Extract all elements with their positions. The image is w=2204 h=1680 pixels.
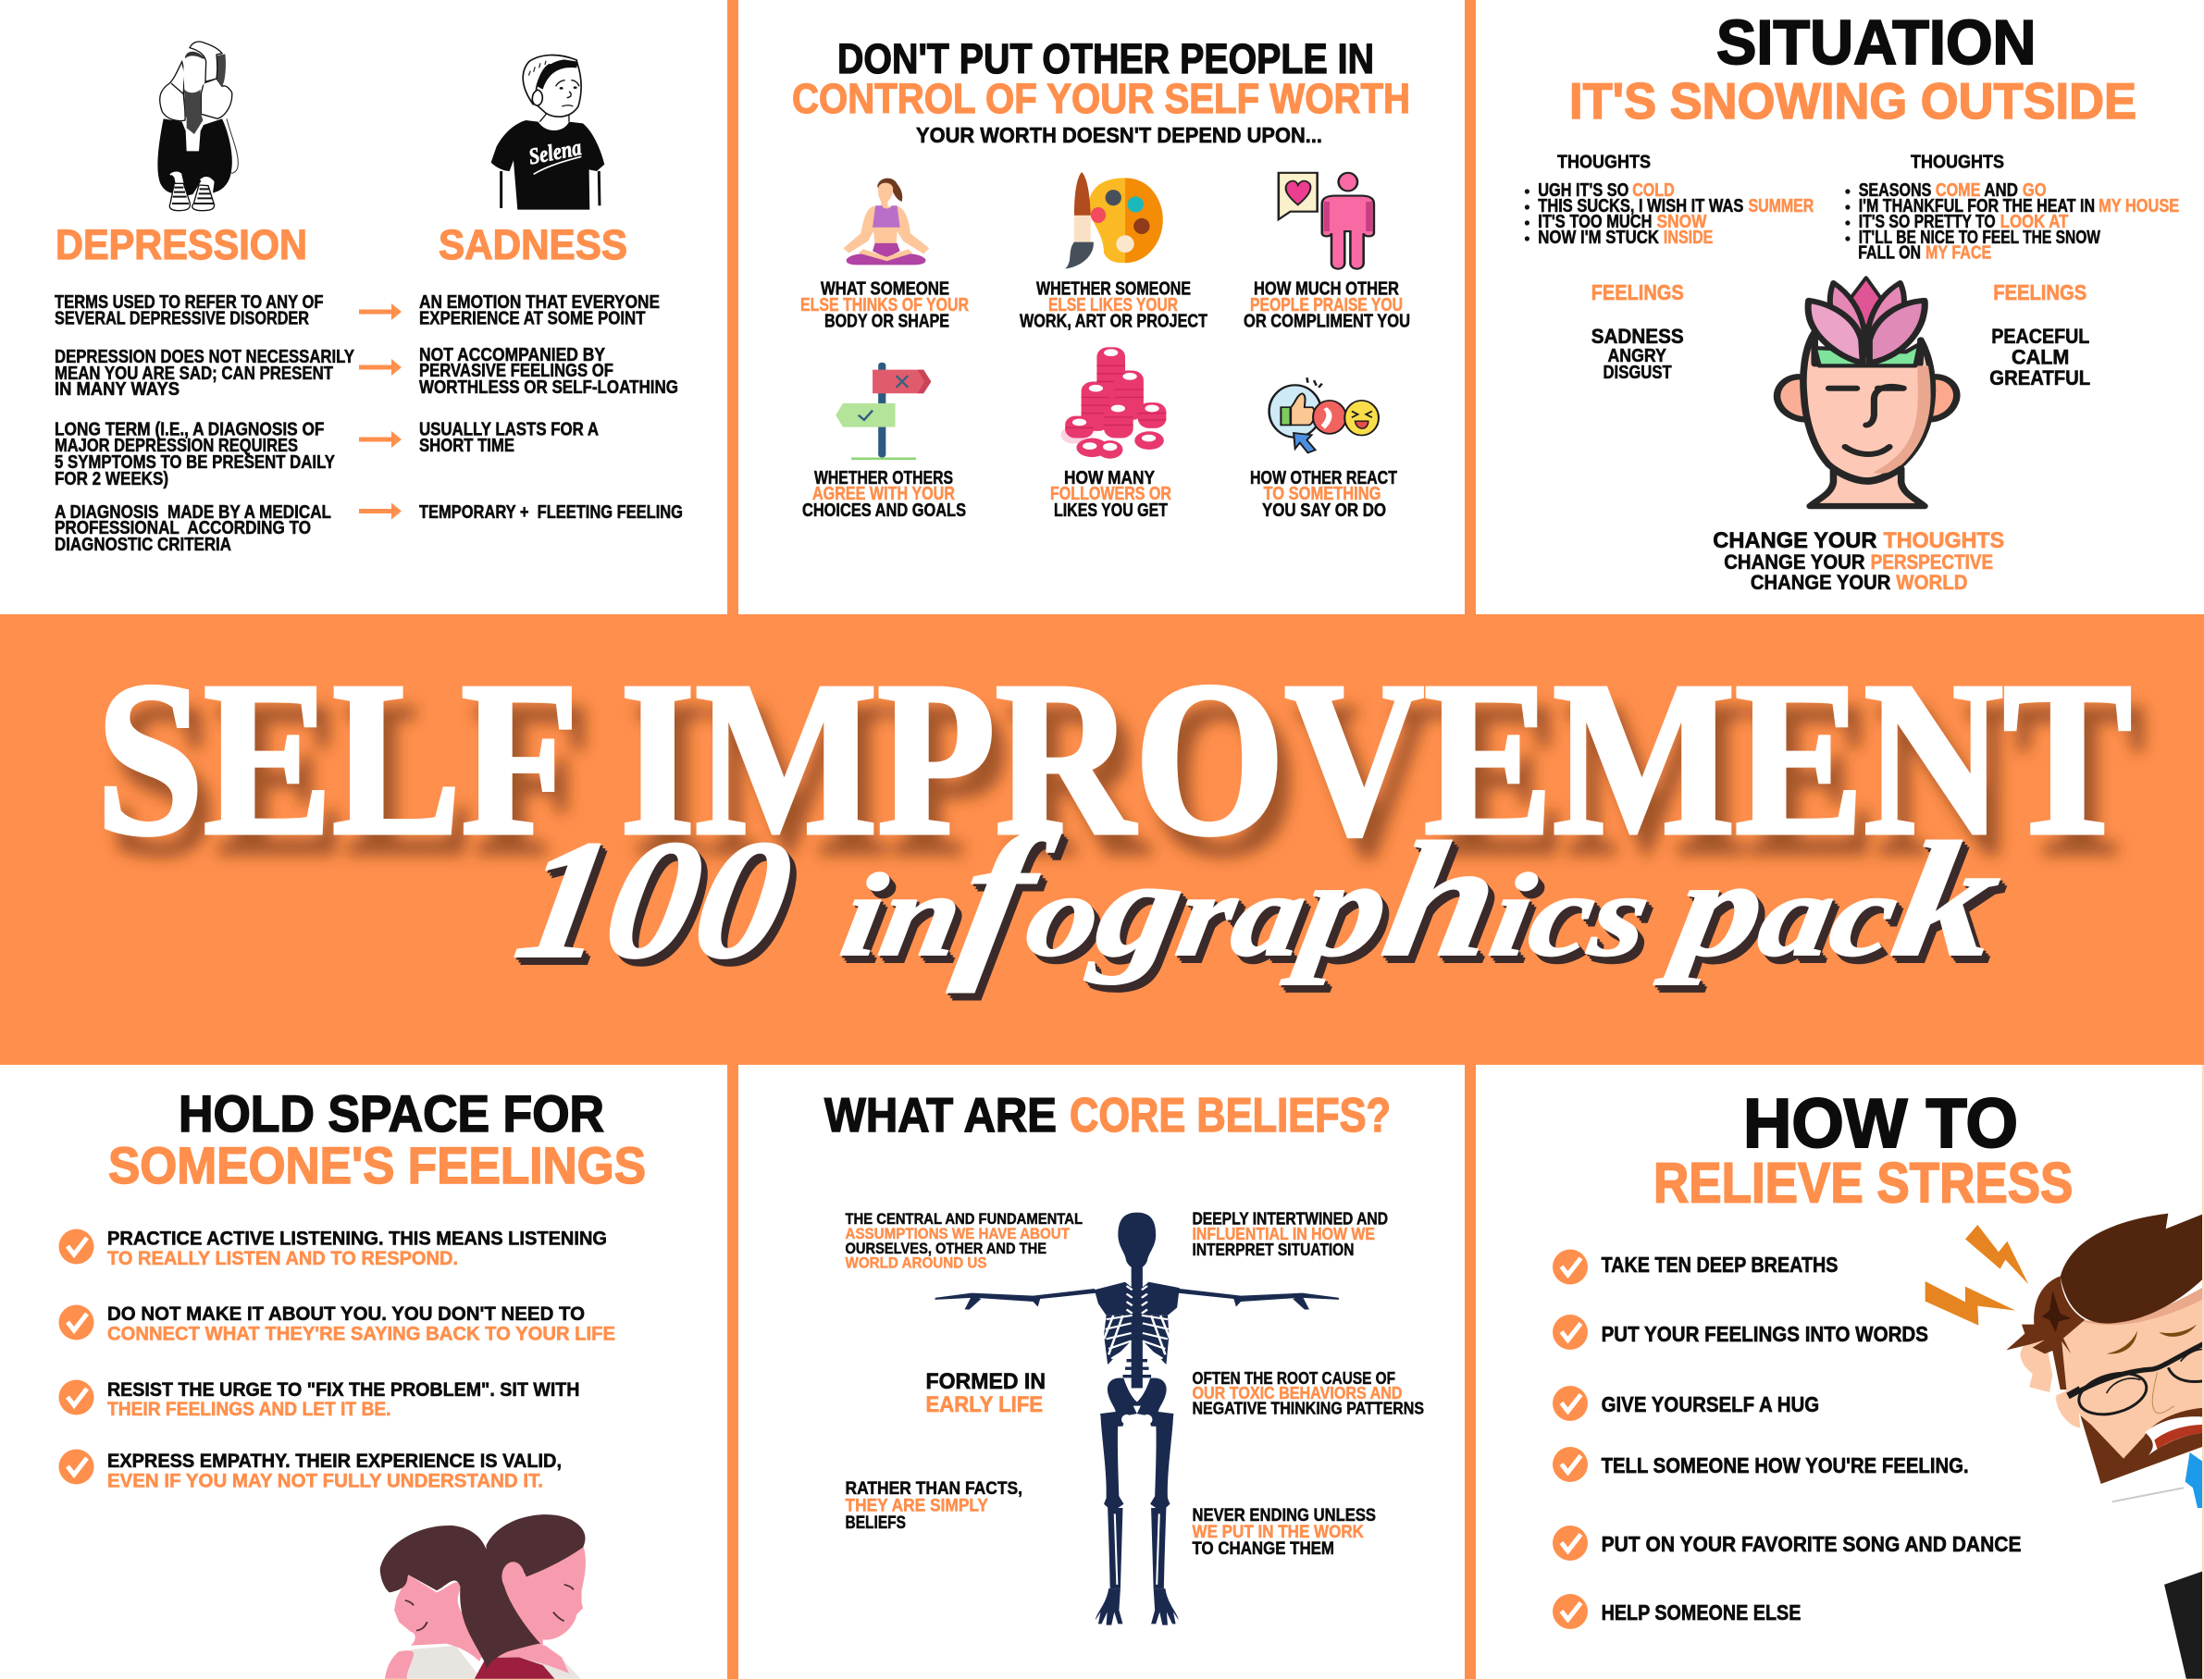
text block: negative thoughts: COLD <box>1632 180 1675 201</box>
tip one: TO REALLY LISTEN AND TO RESPOND. <box>107 1248 458 1269</box>
text block: negative feelings: DISGUST <box>1603 363 1672 383</box>
checklist: six stress relievers: HELP SOMEONE ELSE <box>1602 1600 1801 1624</box>
heading: hold space title: HOLD SPACE FOR <box>179 1084 604 1143</box>
text block: sadness column: WORTHLESS OR SELF-LOATHING <box>419 377 678 398</box>
icon: head with lotus <box>1777 278 1957 506</box>
text block: change your thoughts <box>1713 528 2004 594</box>
heading: relieve stress title: HOW TO <box>1743 1084 2018 1162</box>
text block: change your thoughts: CHANGE YOUR <box>1724 550 1865 574</box>
text block: negative feelings: SADNESS <box>1591 325 1684 348</box>
text block: caption row two: HOW MANY <box>1064 468 1156 488</box>
text block: negative feelings: ANGRY <box>1608 346 1666 366</box>
heading: situation title: IT'S SNOWING OUTSIDE <box>1569 72 2136 130</box>
text block: never ending <box>1192 1506 1376 1559</box>
tip four: EVEN IF YOU MAY NOT FULLY UNDERSTAND IT. <box>107 1471 543 1491</box>
text block: caption row two <box>802 468 1397 521</box>
heading: core beliefs title: WHAT ARE <box>824 1089 1057 1143</box>
text block: depression column <box>55 292 355 555</box>
text block: caption row one: WHAT SOMEONE <box>821 279 949 300</box>
text block: positive thoughts: IT'S SO PRETTY TO <box>1859 212 1996 232</box>
text block: root cause <box>1192 1369 1424 1417</box>
text block: assumptions: WORLD AROUND US <box>846 1254 986 1271</box>
heading: relieve stress title <box>1653 1084 2073 1214</box>
text block: depression column: MAJOR DEPRESSION REQUIRES <box>55 436 298 456</box>
text block: depression column: SEVERAL DEPRESSIVE DISORDER <box>55 309 309 329</box>
tip three: THEIR FEELINGS AND LET IT BE. <box>107 1399 390 1420</box>
heading: situation title: SITUATION <box>1716 7 2036 78</box>
tip two: CONNECT WHAT THEY'RE SAYING BACK TO YOUR LIFE <box>107 1323 615 1345</box>
text block: sadness column <box>419 292 683 523</box>
text block: caption row two: TO SOMETHING <box>1264 484 1381 504</box>
text block: caption row one: PEOPLE PRAISE YOU <box>1250 295 1403 315</box>
text block: rather than facts <box>846 1479 1022 1533</box>
text block: formed in early life: FORMED IN <box>925 1369 1046 1394</box>
checklist: four tips <box>59 1229 615 1491</box>
tip one: PRACTICE ACTIVE LISTENING. THIS MEANS LISTENING <box>107 1229 607 1249</box>
text block: depression column: PROFESSIONAL ACCORDING TO <box>55 518 311 538</box>
text block: sadness column: EXPERIENCE AT SOME POINT <box>419 309 646 329</box>
text block: depression column: DEPRESSION DOES NOT NECESSARILY <box>55 347 355 367</box>
tip four: EXPRESS EMPATHY. THEIR EXPERIENCE IS VALID, <box>107 1451 562 1472</box>
text block: depression column: MEAN YOU ARE SAD; CAN PRESENT <box>55 364 333 384</box>
illustration: skeleton <box>935 1213 1339 1625</box>
arrows between columns <box>359 303 402 520</box>
text block: positive feelings <box>1989 280 2090 389</box>
icon: sad boy in black t-shirt: Selena <box>526 135 584 170</box>
banner: title band <box>0 614 2204 1065</box>
text block: never ending: WE PUT IN THE WORK <box>1192 1523 1364 1542</box>
text block: change your thoughts: WORLD <box>1896 571 1967 594</box>
icon: meditating woman <box>843 179 929 265</box>
icon: signpost <box>836 363 931 459</box>
heading: situation title <box>1569 7 2136 130</box>
panel: core beliefs <box>738 1065 1465 1680</box>
text block: depression column: A DIAGNOSIS MADE BY A MEDICAL <box>55 502 331 523</box>
tip two <box>59 1303 615 1345</box>
heading: core beliefs title: CORE BELIEFS? <box>1070 1089 1391 1143</box>
text block: caption row one: HOW MUCH OTHER <box>1254 279 1399 300</box>
heading: core beliefs title <box>824 1089 1391 1143</box>
text block: caption row two: YOU SAY OR DO <box>1262 500 1386 521</box>
text block: change your thoughts: CHANGE YOUR <box>1713 528 1876 553</box>
subtitle: 100 infographics pack: infographics <box>831 798 1668 994</box>
icon: stacks of like coins <box>1061 347 1166 459</box>
text block: assumptions: OURSELVES, OTHER AND THE <box>846 1240 1046 1257</box>
text block: intertwined: INFLUENTIAL IN HOW WE <box>1192 1225 1375 1243</box>
text block: change your thoughts: CHANGE YOUR <box>1751 571 1890 594</box>
text block: never ending: TO CHANGE THEM <box>1192 1539 1334 1559</box>
text block: change your thoughts: THOUGHTS <box>1884 528 2004 553</box>
text block: positive feelings: GREATFUL <box>1989 366 2090 389</box>
text block: caption row one: WHETHER SOMEONE <box>1036 279 1191 300</box>
text block: root cause: OUR TOXIC BEHAVIORS AND <box>1192 1384 1403 1402</box>
panel: relieve stress <box>1476 1065 2204 1680</box>
text block: positive thoughts: AND <box>1984 180 2018 201</box>
tip three: RESIST THE URGE TO "FIX THE PROBLEM". SIT WITH <box>107 1379 579 1401</box>
text block: positive thoughts <box>1845 152 2179 263</box>
text block: caption row two: WHETHER OTHERS <box>814 468 953 488</box>
heading: hold space title: SOMEONE'S FEELINGS <box>108 1136 646 1194</box>
tip four <box>59 1449 562 1491</box>
text block: positive feelings: CALM <box>2012 346 2069 368</box>
text block: sadness column: TEMPORARY + FLEETING FEELING <box>419 502 683 523</box>
icon: person receiving praise <box>1279 173 1374 269</box>
text block: change your thoughts: PERSPECTIVE <box>1871 550 1993 574</box>
text block: formed in early life <box>925 1369 1046 1417</box>
checklist: six stress relievers: TAKE TEN DEEP BREATHS <box>1602 1253 1838 1277</box>
tip two: DO NOT MAKE IT ABOUT YOU. YOU DON'T NEED TO <box>107 1303 585 1325</box>
text block: caption row two: CHOICES AND GOALS <box>802 500 966 521</box>
text block: positive thoughts: MY HOUSE <box>2099 196 2179 216</box>
icon: social reactions <box>1269 377 1379 452</box>
text block: positive thoughts: SEASONS <box>1859 180 1931 201</box>
subtitle: 100 infographics pack: 100 <box>504 806 804 994</box>
text block: positive thoughts: LOOK AT <box>2000 212 2068 232</box>
illustration: two women back to back <box>380 1514 586 1679</box>
text block: rather than facts: RATHER THAN FACTS, <box>846 1479 1022 1499</box>
text block: never ending: NEVER ENDING UNLESS <box>1192 1506 1376 1526</box>
text block: rather than facts: THEY ARE SIMPLY <box>846 1497 988 1515</box>
text block: caption row two: LIKES YOU GET <box>1054 500 1168 521</box>
text block: positive thoughts: GO <box>2023 180 2047 201</box>
text block: depression column: DIAGNOSTIC CRITERIA <box>55 535 231 555</box>
text block: caption row one: ELSE LIKES YOUR <box>1048 295 1178 315</box>
icon: girl sitting with head in hands <box>157 42 238 211</box>
text block: negative feelings <box>1591 280 1684 383</box>
text block: intertwined <box>1192 1210 1388 1259</box>
panel: hold space <box>0 1065 727 1680</box>
text block: positive feelings: FEELINGS <box>1993 280 2086 304</box>
text block: sadness column: AN EMOTION THAT EVERYONE <box>419 292 660 313</box>
text block: negative thoughts: IT'S TOO MUCH <box>1538 212 1653 232</box>
icon: palette and brush <box>1065 172 1163 269</box>
heading: sadness: SADNESS <box>439 221 627 268</box>
text block: negative thoughts: THOUGHTS <box>1557 152 1651 172</box>
checklist: six stress relievers: GIVE YOURSELF A HUG <box>1602 1392 1819 1416</box>
text block: assumptions <box>846 1210 1083 1271</box>
text block: negative feelings: FEELINGS <box>1591 280 1684 304</box>
illustration: stressed man with lightning bolts <box>1925 1213 2204 1679</box>
text block: negative thoughts: THIS SUCKS, I WISH IT WAS <box>1538 196 1743 216</box>
text block: negative thoughts: INSIDE <box>1664 228 1713 248</box>
text block: positive thoughts: COME <box>1936 180 1980 201</box>
text block: rather than facts: BELIEFS <box>846 1513 906 1533</box>
text block: intertwined: INTERPRET SITUATION <box>1192 1241 1355 1259</box>
text block: root cause: OFTEN THE ROOT CAUSE OF <box>1192 1369 1395 1388</box>
text block: sadness column: USUALLY LASTS FOR A <box>419 420 599 440</box>
text block: positive thoughts: I'M THANKFUL FOR THE HEAT IN <box>1859 196 2095 216</box>
text block: negative thoughts <box>1525 152 1814 248</box>
text block: positive thoughts: FALL ON <box>1858 242 1921 263</box>
panel: depression vs sadness <box>0 0 727 614</box>
text block: sadness column: PERVASIVE FEELINGS OF <box>419 361 613 381</box>
text block: caption row one: WORK, ART OR PROJECT <box>1020 311 1207 331</box>
text block: negative thoughts: SNOW <box>1656 212 1707 232</box>
text block: positive feelings: PEACEFUL <box>1991 325 2089 348</box>
text block: assumptions: THE CENTRAL AND FUNDAMENTAL <box>846 1210 1083 1228</box>
panel: self worth <box>738 0 1465 614</box>
icon: sad boy in black t-shirt <box>491 56 604 210</box>
text block: negative thoughts: UGH IT'S SO <box>1538 180 1628 201</box>
panel: situation <box>1476 0 2204 614</box>
text block: caption row one: BODY OR SHAPE <box>824 311 949 331</box>
tip three <box>59 1379 579 1420</box>
heading: self worth title: CONTROL OF YOUR SELF WORTH <box>792 75 1410 122</box>
text block: caption row one: OR COMPLIMENT YOU <box>1244 311 1410 331</box>
heading: hold space title <box>108 1084 646 1194</box>
text block: positive thoughts: MY FACE <box>1925 242 1991 263</box>
text block: positive thoughts: THOUGHTS <box>1911 152 2004 172</box>
checklist: six stress relievers: PUT ON YOUR FAVORITE SONG AND DANCE <box>1602 1532 2021 1556</box>
text block: assumptions: ASSUMPTIONS WE HAVE ABOUT <box>846 1225 1071 1242</box>
text block: negative thoughts: SUMMER <box>1749 196 1814 216</box>
heading: depression: DEPRESSION <box>56 221 307 268</box>
heading: self worth title: DON'T PUT OTHER PEOPLE IN <box>837 35 1374 82</box>
text block: positive thoughts: IT'LL BE NICE TO FEEL THE SNOW <box>1859 228 2100 248</box>
checklist: six stress relievers: TELL SOMEONE HOW YOU'RE FEELING. <box>1602 1453 1969 1477</box>
heading: relieve stress title: RELIEVE STRESS <box>1653 1151 2073 1214</box>
checklist: six stress relievers <box>1553 1249 2021 1629</box>
checklist: six stress relievers: PUT YOUR FEELINGS INTO WORDS <box>1602 1322 1928 1346</box>
text block: depression column: LONG TERM (I.E., A DIAGNOSIS OF <box>55 420 324 440</box>
text block: caption row two: HOW OTHER REACT <box>1250 468 1397 488</box>
text block: intertwined: DEEPLY INTERTWINED AND <box>1192 1210 1388 1229</box>
heading: self worth title <box>792 35 1410 147</box>
subtitle: 100 infographics pack: pack <box>1653 808 2013 991</box>
text block: caption row two: FOLLOWERS OR <box>1050 484 1171 504</box>
text block: depression column: TERMS USED TO REFER TO ANY OF <box>55 292 324 313</box>
text block: depression column: IN MANY WAYS <box>55 379 180 400</box>
text block: caption row one <box>800 279 1410 331</box>
text block: negative thoughts: NOW I'M STUCK <box>1538 228 1659 248</box>
text block: sadness column: SHORT TIME <box>419 436 514 456</box>
tip one <box>59 1229 607 1269</box>
heading: self worth title: YOUR WORTH DOESN'T DEPEND UPON... <box>916 123 1322 147</box>
text block: caption row two: AGREE WITH YOUR <box>812 484 955 504</box>
text block: depression column: FOR 2 WEEKS) <box>55 469 168 489</box>
text block: root cause: NEGATIVE THINKING PATTERNS <box>1192 1399 1424 1417</box>
text block: formed in early life: EARLY LIFE <box>925 1392 1043 1417</box>
text block: depression column: 5 SYMPTOMS TO BE PRESENT DAILY <box>55 452 336 473</box>
subtitle: 100 infographics pack <box>504 798 2013 994</box>
text block: caption row one: ELSE THINKS OF YOUR <box>800 295 969 315</box>
bottom edge line <box>0 1679 2204 1680</box>
text block: sadness column: NOT ACCOMPANIED BY <box>419 345 606 365</box>
